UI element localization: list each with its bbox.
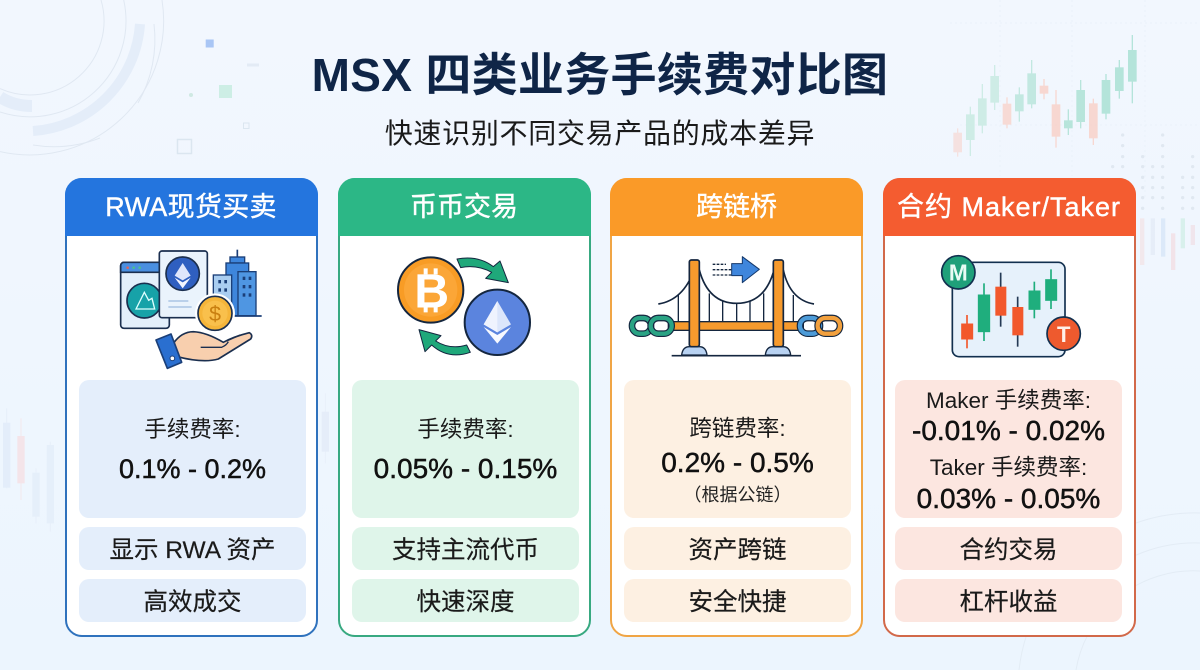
fee rate box (79, 380, 306, 518)
heading: bridge (610, 178, 863, 236)
icon: candlestick chart with M and T: T (1057, 322, 1071, 347)
feature: leveraged returns (895, 579, 1122, 622)
taker label: Taker 手续费率: (930, 455, 1087, 480)
feature: RWA assets: 显示 RWA 资产 (109, 536, 276, 564)
icon: candlestick chart with M and T: M (949, 260, 968, 286)
fee value: 0.1% - 0.2% (119, 454, 266, 484)
heading: RWA (64, 178, 318, 236)
feature: contract trading: 合约交易 (960, 536, 1058, 564)
heading: coin trading (338, 178, 590, 236)
feature: mainstream tokens: 支持主流代币 (392, 536, 539, 564)
feature: safe and fast: 安全快捷 (688, 589, 786, 616)
feature: efficient fills (79, 579, 306, 622)
feature: efficient fills: 高效成交 (144, 589, 242, 616)
fee rate box (352, 380, 579, 518)
feature: safe and fast (624, 579, 851, 622)
feature: cross-chain assets: 资产跨链 (688, 536, 786, 564)
panel: coin-to-coin trading (338, 178, 590, 636)
panel: perpetual contracts (882, 178, 1136, 636)
heading: RWA: RWA现货买卖 (105, 192, 277, 222)
maker label: Maker 手续费率: (926, 388, 1091, 413)
panel: RWA spot trading (64, 178, 318, 636)
feature: fast depth: 快速深度 (416, 589, 514, 616)
fee value: 0.2% - 0.5% (661, 447, 814, 478)
feature: RWA assets (79, 526, 306, 570)
heading: contracts: 合约 Maker/Taker (897, 192, 1121, 222)
fee rate box (895, 380, 1122, 518)
fee rate box (624, 380, 851, 518)
feature: contract trading (895, 526, 1122, 570)
icon: candlestick chart with M and T (940, 254, 1082, 358)
icon: RWA assets on a hand (120, 250, 262, 370)
feature: fast depth (352, 579, 579, 622)
panel: cross-chain bridge (610, 178, 863, 636)
feature: cross-chain assets (624, 526, 851, 570)
heading: bridge: 跨链桥 (696, 192, 777, 222)
fee label: 手续费率: (144, 417, 241, 442)
icon: RWA assets on a hand: $ (209, 302, 221, 326)
icon: chain bridge (628, 256, 844, 356)
icon: BTC ETH swap (397, 256, 531, 356)
fee value: 0.05% - 0.15% (374, 453, 557, 484)
taker value: 0.03% - 0.05% (917, 483, 1100, 514)
icon: BTC ETH swap: B (414, 264, 449, 318)
subtitle: 快速识别不同交易产品的成本差异 (385, 118, 815, 149)
fee note: （根据公链） (684, 485, 792, 505)
fee label: 跨链费率: (689, 416, 786, 441)
feature: leveraged returns: 杠杆收益 (960, 589, 1058, 616)
heading: contracts (882, 178, 1136, 236)
fee label: 手续费率: (417, 417, 514, 442)
title: MSX 四类业务手续费对比图 (312, 49, 888, 101)
feature: mainstream tokens (352, 526, 579, 570)
heading: coin trading: 币币交易 (410, 192, 518, 222)
maker value: -0.01% - 0.02% (912, 415, 1105, 446)
